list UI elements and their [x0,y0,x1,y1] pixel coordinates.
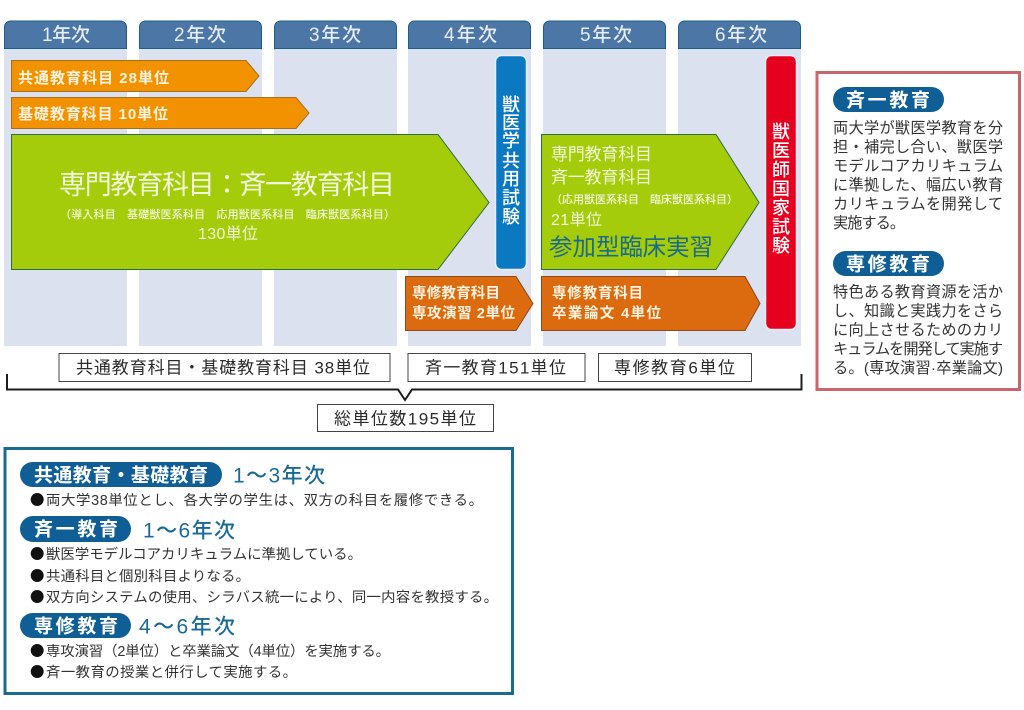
exam bar: 獣医師国家試験: 試 [772,217,790,237]
bullet line: 専攻演習（2単位）と卒業論文（4単位）を実施する。 [46,643,390,660]
year header: 6年次: 6年次 [715,24,767,46]
pill: 専修教育 [20,613,131,638]
pill: 斉一教育: 斉一教育 [846,90,930,112]
bullet line: ● [30,661,44,682]
text block: 専修教育 description: し、知識と実践力をさら [833,303,1003,320]
arrow: 専攻演習 2単位: 専攻演習 2単位 [412,304,516,322]
text block: 専修教育 description: る。(専攻演習·卒業論文) [833,360,1003,377]
exam bar: 獣医師国家試験: 師 [772,160,790,180]
text block: 専修教育 description [833,284,1003,377]
exam bar: 獣医師国家試験: 家 [772,198,790,218]
arrow: 専門教育科目 参加型臨床実習: 専門教育科目 [551,145,652,164]
arrow: 共通教育科目 28単位: 共通教育科目 28単位 [18,69,169,87]
year header: 1年次: 1年次 [42,24,90,46]
pill: 共通教育・基礎教育: 共通教育・基礎教育 [34,464,208,486]
exam bar: 獣医学共用試験: 獣 [502,95,520,115]
exam bar: 獣医学共用試験: 試 [502,188,520,208]
text block: 斉一教育 description: 実施する。 [833,215,905,232]
bracket [7,374,802,400]
year columns [4,40,801,346]
panel: definitions [817,72,1020,390]
bullet line: ● [30,586,44,607]
arrow: 専門教育科目 参加型臨床実習: 斉一教育科目 [551,168,652,187]
arrow: 専門教育科目 斉一教育科目 130単位: 専門教育科目：斉一教育科目 [59,170,395,200]
exam bar: 獣医師国家試験: 験 [772,236,790,256]
exam bar: 獣医学共用試験 [496,56,526,270]
arrow: 卒業論文 4単位: 卒業論文 4単位 [552,304,662,322]
bullet line: 斉一教育の授業と併行して実施する。 [46,664,297,681]
arrow: 専門教育科目 参加型臨床実習: 参加型臨床実習 [549,234,713,260]
summary box: 斉一教育151単位 [408,354,585,382]
exam bar: 獣医師国家試験: 国 [772,179,790,199]
text block: 専修教育 description: に向上させるためのカリ [833,322,1003,339]
arrow: 専攻演習 2単位: 専修教育科目 [412,284,500,302]
text block: 斉一教育 description: に準拠した、幅広い教育 [833,177,1003,194]
year header: 2年次: 2年次 [174,24,226,46]
pill: 専修教育: 専修教育 [846,254,930,276]
arrow: 卒業論文 4単位 [542,276,760,330]
bullet line: ● [30,565,44,586]
text block: 専修教育 description: 特色ある教育資源を活か [833,284,1003,301]
exam bar: 獣医師国家試験: 獣 [772,122,790,142]
years: 4～6年次: 4～6年次 [139,616,235,638]
bullet line: 獣医学モデルコアカリキュラムに準拠している。 [46,545,362,563]
exam bar: 獣医学共用試験: 学 [502,131,520,151]
pill: 斉一教育 [20,516,131,542]
exam bar: 獣医師国家試験 [766,56,796,330]
pill: 専修教育: 専修教育 [34,616,118,638]
text block: 斉一教育 description: 担・補完し合い、獣医学 [833,139,1003,156]
text block: 斉一教育 description: カリキュラムを開発して [833,196,1003,213]
bullet line: ● [30,640,44,661]
arrow: 卒業論文 4単位: 専修教育科目 [552,284,643,302]
arrow: 基礎教育科目 10単位: 基礎教育科目 10単位 [18,105,168,123]
arrow: 専門教育科目 参加型臨床実習: （応用獣医系科目 臨床獣医系科目） [551,192,738,206]
summary box: 専修教育6単位: 専修教育6単位 [614,358,735,378]
text block: 専修教育 description: キュラムを開発して実施す [833,341,1003,358]
year header: 2年次 [140,21,262,48]
text block: 斉一教育 description: 両大学が獣医学教育を分 [833,120,1003,137]
bullet line: 共通科目と個別科目よりなる。 [46,568,250,585]
summary box: 共通・基礎 38単位 [59,354,390,382]
bullet line: 両大学38単位とし、各大学の学生は、双方の科目を履修できる。 [46,492,483,509]
year header: 5年次: 5年次 [580,24,632,46]
pill: 斉一教育 [833,87,944,112]
years: 1～6年次: 1～6年次 [143,520,235,542]
arrow: 共通教育科目 28単位 [12,60,259,92]
arrow: 基礎教育科目 10単位 [12,98,309,128]
arrow: 専門教育科目 参加型臨床実習: 21単位 [551,211,602,229]
arrow: 専攻演習 2単位 [406,276,533,330]
year header: 3年次: 3年次 [309,24,361,46]
year header: 3年次 [274,21,396,48]
bullet line: ● [30,489,44,510]
arrow: 専門教育科目 参加型臨床実習 [542,134,759,270]
exam bar: 獣医師国家試験: 医 [772,141,790,161]
year header: 4年次 [408,21,530,48]
arrow: 専門教育科目 斉一教育科目 130単位: （導入科目 基礎獣医系科目 応用獣医系科目 臨床獣医系科目） [60,207,395,221]
years: 1～3年次: 1～3年次 [233,464,325,488]
exam bar: 獣医学共用試験: 験 [502,207,520,227]
bullet line: 双方向システムの使用、シラバス統一により、同一内容を教授する。 [46,589,498,606]
year header: 6年次 [678,21,800,48]
year header: 5年次 [544,21,666,48]
exam bar: 獣医学共用試験: 共 [502,151,520,171]
text block: 斉一教育 description: モデルコアカリキュラム [833,157,1003,175]
bullet line: ● [30,543,44,564]
summary box: 共通・基礎 38単位: 共通教育科目・基礎教育科目 38単位 [76,358,370,378]
text block: 斉一教育 description [833,120,1003,232]
total box: 総単位数195単位 [318,404,494,432]
exam bar: 獣医学共用試験: 用 [502,169,520,189]
arrow: 専門教育科目 斉一教育科目 130単位 [12,134,489,270]
summary box: 専修教育6単位 [598,354,752,382]
pill: 斉一教育: 斉一教育 [34,518,118,540]
total box: 総単位数195単位: 総単位数195単位 [334,410,476,428]
year header: 1年次 [4,21,126,48]
year header: 4年次: 4年次 [444,24,497,46]
exam bar: 獣医学共用試験: 医 [502,113,520,133]
pill: 専修教育 [833,251,944,276]
summary box: 斉一教育151単位: 斉一教育151単位 [425,358,566,378]
arrow: 専門教育科目 斉一教育科目 130単位: 130単位 [198,225,258,243]
panel: education by year [5,448,512,694]
